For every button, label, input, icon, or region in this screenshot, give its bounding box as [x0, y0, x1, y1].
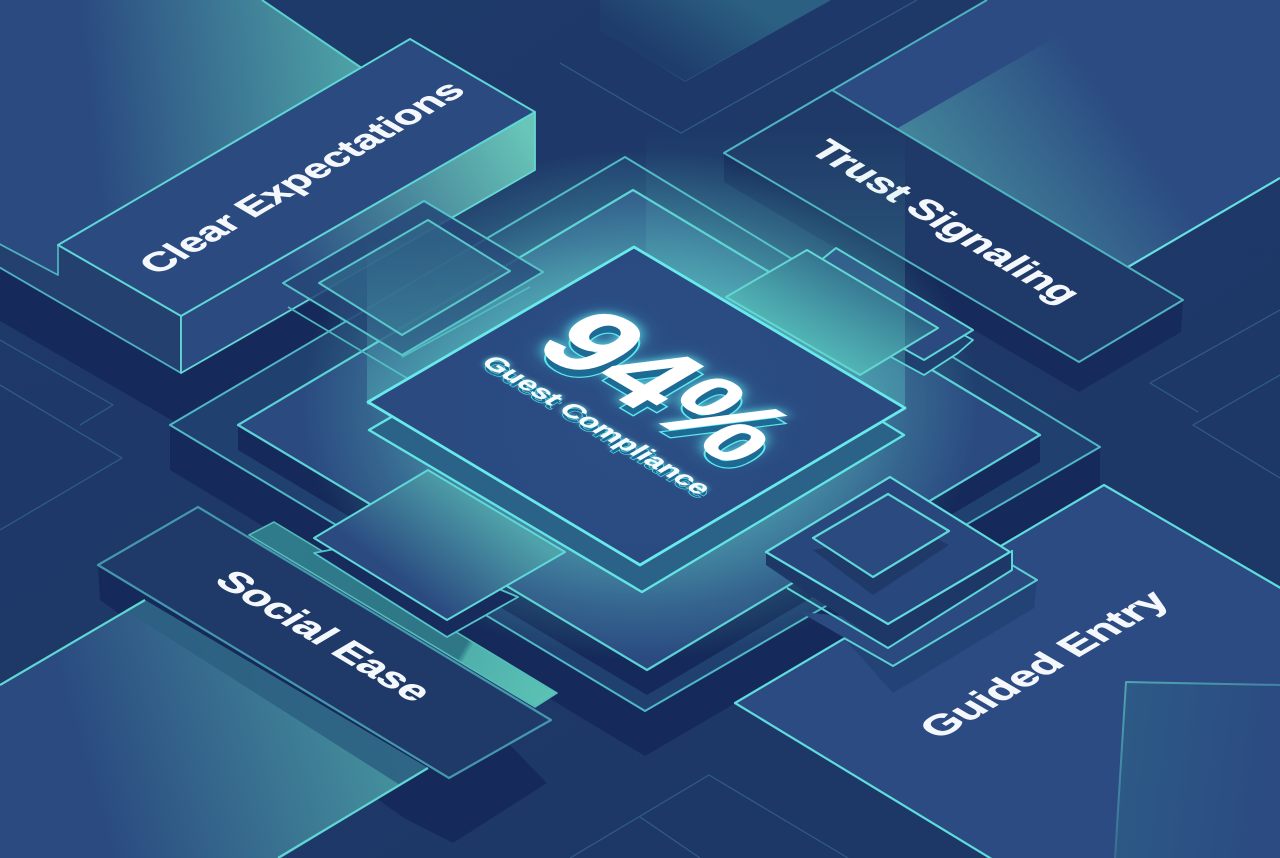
panel: second stack layer: [238, 190, 1040, 670]
glow around central card: [300, 150, 980, 660]
panel: bottom left backdrop: [0, 600, 428, 858]
plate stack: bottom right: [766, 477, 1037, 693]
shadow under trust signaling: [724, 153, 1183, 392]
plate stack: bottom left: [314, 470, 565, 637]
panel: central stack lower layer shadows: [170, 425, 1100, 756]
shadow under clear expectations block: [0, 265, 340, 425]
label: clear expectations text: Clear Expectations: [130, 75, 475, 280]
caption: guest compliance: Guest Compliance: [475, 356, 719, 502]
plate stack: top right: [726, 248, 973, 375]
caption: guest compliance: Guest Compliance: [475, 352, 719, 498]
panel: trust signaling: [724, 90, 1183, 362]
top center faded panel: [600, 0, 830, 81]
shadow under bottom left: [98, 565, 547, 843]
metric: 94%: 94%: [508, 293, 824, 480]
label: guided entry text: Guided Entry: [909, 584, 1179, 744]
label: trust signaling text: Trust Signaling: [800, 135, 1090, 309]
metric: 94%: 94%: [508, 293, 824, 480]
metric: 94%: 94%: [508, 293, 824, 480]
panel: clear expectations block: [0, 39, 535, 373]
metric: 94%: 94%: [508, 301, 824, 488]
third layer under central card: [369, 272, 904, 592]
light beams above card: [367, 130, 905, 405]
panel: social ease: [98, 507, 551, 778]
caption: guest compliance: Guest Compliance: [475, 352, 719, 498]
central card: [368, 247, 905, 565]
panel: top right backdrop: [724, 0, 1280, 267]
panel: guided entry backdrop: [735, 485, 1280, 858]
panel: widest stack layer: [170, 157, 1100, 711]
shadow of second stack layer: [238, 425, 1040, 695]
plate stack: top left: [283, 201, 543, 380]
strip behind social ease: [249, 522, 557, 707]
panel: top left backdrop: [0, 0, 369, 275]
label: social ease text: Social Ease: [205, 564, 443, 707]
